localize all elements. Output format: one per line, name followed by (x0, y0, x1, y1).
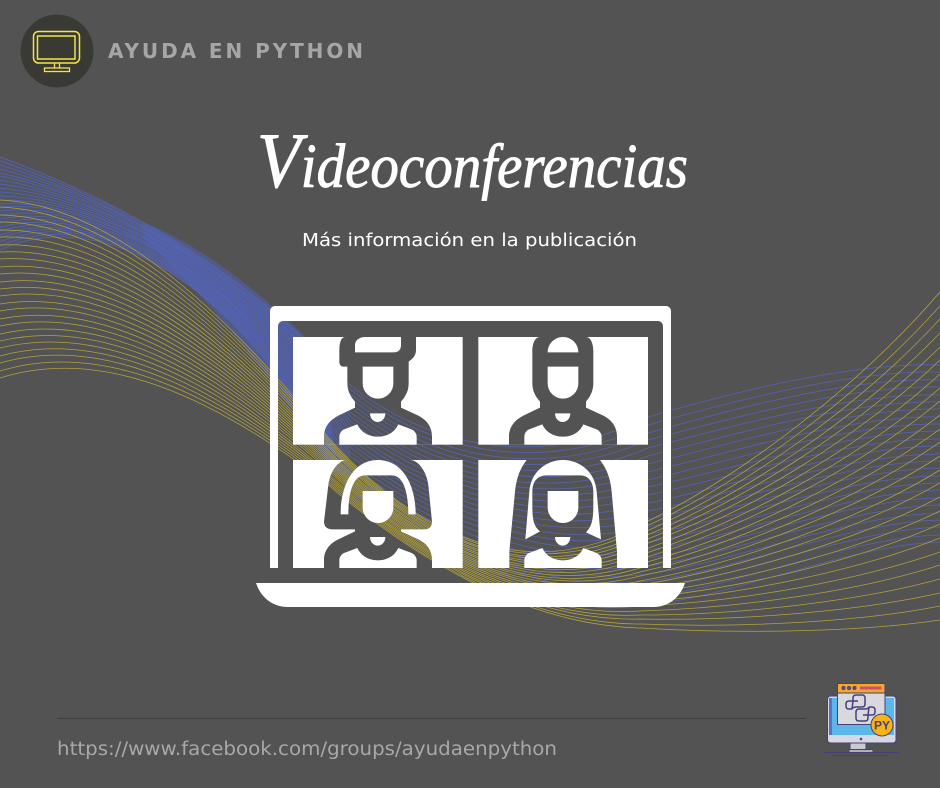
laptop lid frame (270, 306, 671, 568)
laptop base (256, 583, 685, 607)
subtitle: Más información en la publicación (302, 231, 637, 251)
logo badge: monitor icon (20, 14, 94, 88)
video tile: woman with long hair (478, 460, 648, 568)
video tile: man with short hair (293, 337, 463, 445)
footer rule (57, 718, 806, 719)
gold wave lines (0, 200, 940, 631)
icon: python on monitor: PY (874, 718, 890, 732)
title: Videoconferencias (257, 117, 688, 204)
icon: python on monitor (824, 684, 899, 756)
brand name: AYUDA EN PYTHON (108, 39, 363, 63)
blue wave lines (0, 157, 940, 606)
video tile: woman with short hair (293, 460, 463, 568)
icon: laptop (256, 306, 685, 607)
footer link: https://www.facebook.com/groups/ayudaenpython (57, 739, 557, 760)
video tile: man with cap (478, 337, 648, 445)
